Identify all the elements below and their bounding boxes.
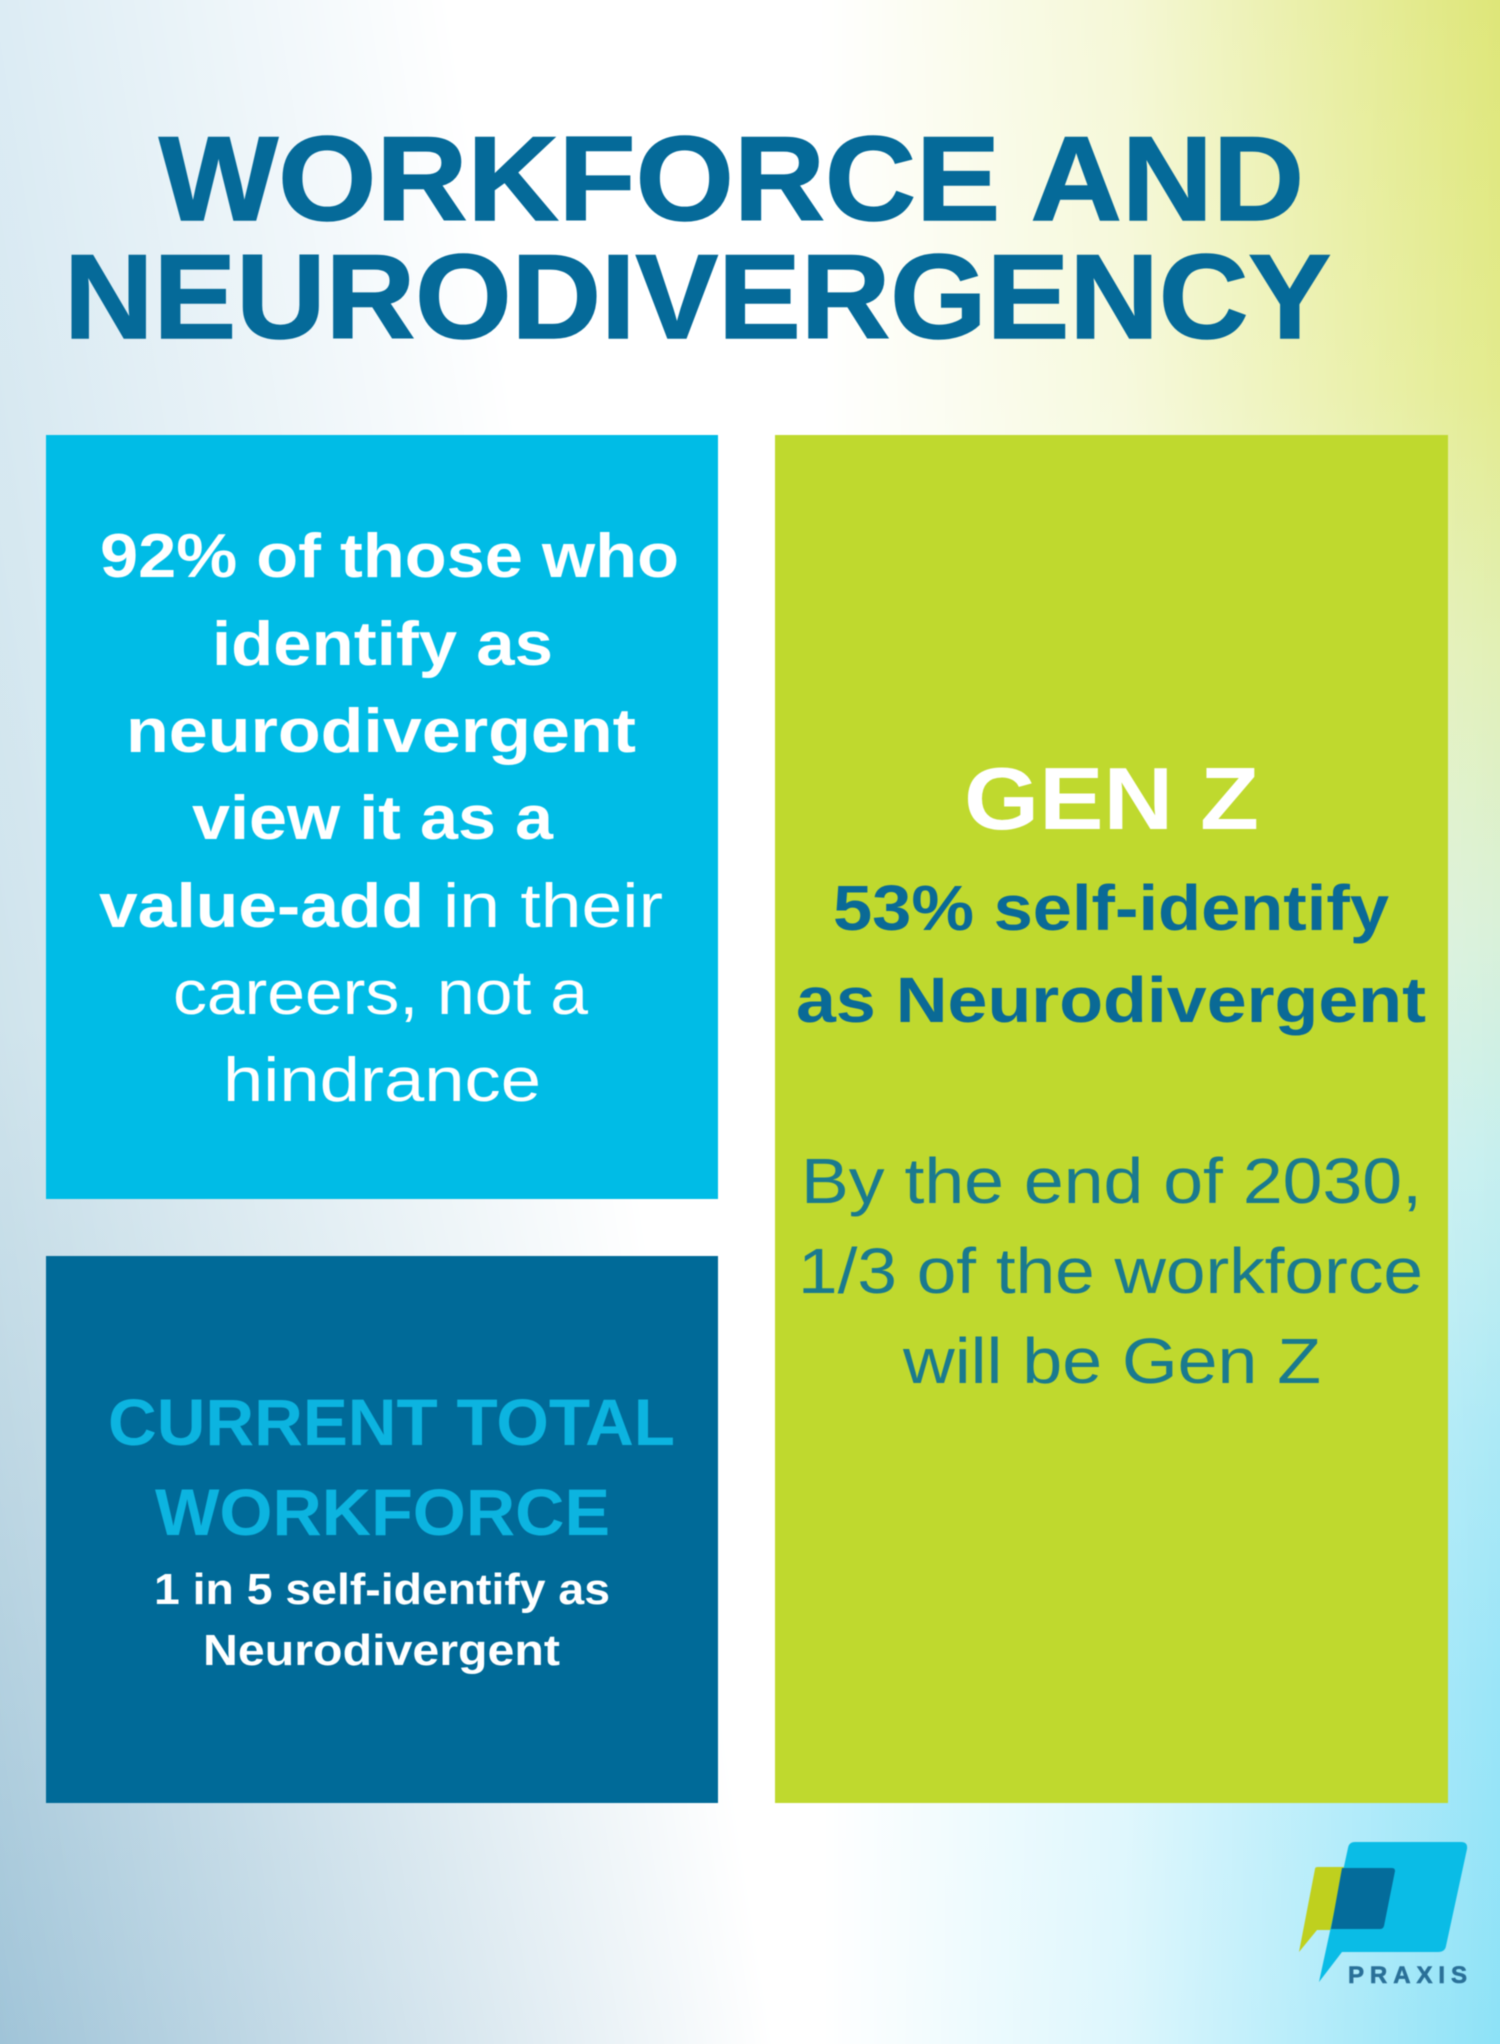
Gen Z projection xyxy=(798,1145,1423,1397)
Gen Z statistic: as Neurodivergent xyxy=(796,964,1426,1036)
icon: yellow speech bubble xyxy=(1299,1867,1344,1952)
statistic text xyxy=(99,522,679,1115)
logo: Praxis xyxy=(1299,1842,1467,1989)
panel heading: CURRENT TOTAL xyxy=(108,1385,675,1459)
panel: current total workforce xyxy=(46,1256,718,1803)
title xyxy=(64,112,1331,364)
statistic text: hindrance xyxy=(223,1046,541,1115)
statistic text: 92% of those who xyxy=(100,522,679,591)
statistic text: identify as xyxy=(212,610,553,679)
icon: blue speech bubble xyxy=(1319,1842,1467,1982)
statistic text: value-add xyxy=(99,872,424,941)
panel: 92% value-add statistic xyxy=(46,435,718,1199)
panel statistic: Neurodivergent xyxy=(203,1626,560,1675)
Gen Z statistic: 53% self-identify xyxy=(833,872,1389,944)
panel statistic: 1 in 5 self-identify as xyxy=(154,1565,610,1614)
panel heading: GEN Z xyxy=(964,749,1259,848)
statistic text: in their xyxy=(443,872,663,941)
statistic text: careers, not a xyxy=(173,959,589,1028)
Gen Z projection: will be Gen Z xyxy=(902,1325,1321,1397)
title: NEURODIVERGENCY xyxy=(64,230,1331,364)
Gen Z projection: 1/3 of the workforce xyxy=(798,1235,1423,1307)
Gen Z projection: By the end of 2030, xyxy=(801,1145,1422,1217)
statistic text: view it as a xyxy=(192,784,554,853)
Gen Z statistic xyxy=(796,872,1426,1036)
statistic text: neurodivergent xyxy=(126,697,636,766)
panel heading xyxy=(108,1385,675,1549)
panel statistic xyxy=(154,1565,610,1675)
panel heading: WORKFORCE xyxy=(155,1475,610,1549)
icon: bubble overlap xyxy=(1331,1868,1395,1929)
title: WORKFORCE AND xyxy=(159,112,1304,246)
logo wordmark: PRAXIS xyxy=(1348,1962,1467,1989)
panel: Gen Z xyxy=(775,435,1448,1803)
